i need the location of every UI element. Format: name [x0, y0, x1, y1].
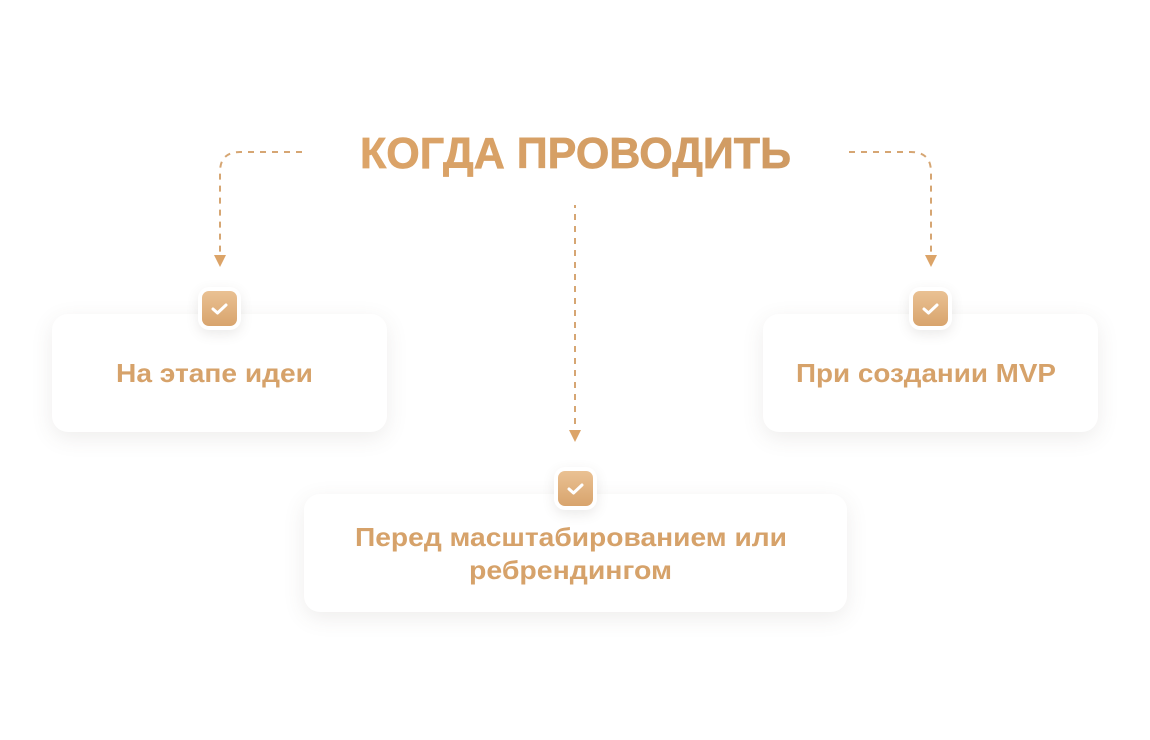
- arrow: to scaling card: [569, 205, 581, 442]
- arrow: to MVP card: [849, 152, 937, 267]
- arrow: to idea card: [214, 152, 302, 267]
- text: idea stage: На этапе идеи: [116, 358, 313, 388]
- text: MVP: При создании MVP: [796, 358, 1056, 388]
- text: before scaling: [355, 522, 787, 585]
- text: before scaling: Перед масштабированием или: [355, 522, 787, 552]
- icon: check badge idea: [198, 287, 241, 330]
- panel: MVP card: [763, 314, 1098, 432]
- text: before scaling: ребрендингом: [469, 555, 672, 585]
- panel: idea stage card: [52, 314, 387, 432]
- icon: check badge MVP: [909, 287, 952, 330]
- title: КОГДА ПРОВОДИТЬ: [360, 129, 791, 178]
- panel: scaling card: [304, 494, 847, 612]
- icon: check badge scaling: [554, 467, 597, 510]
